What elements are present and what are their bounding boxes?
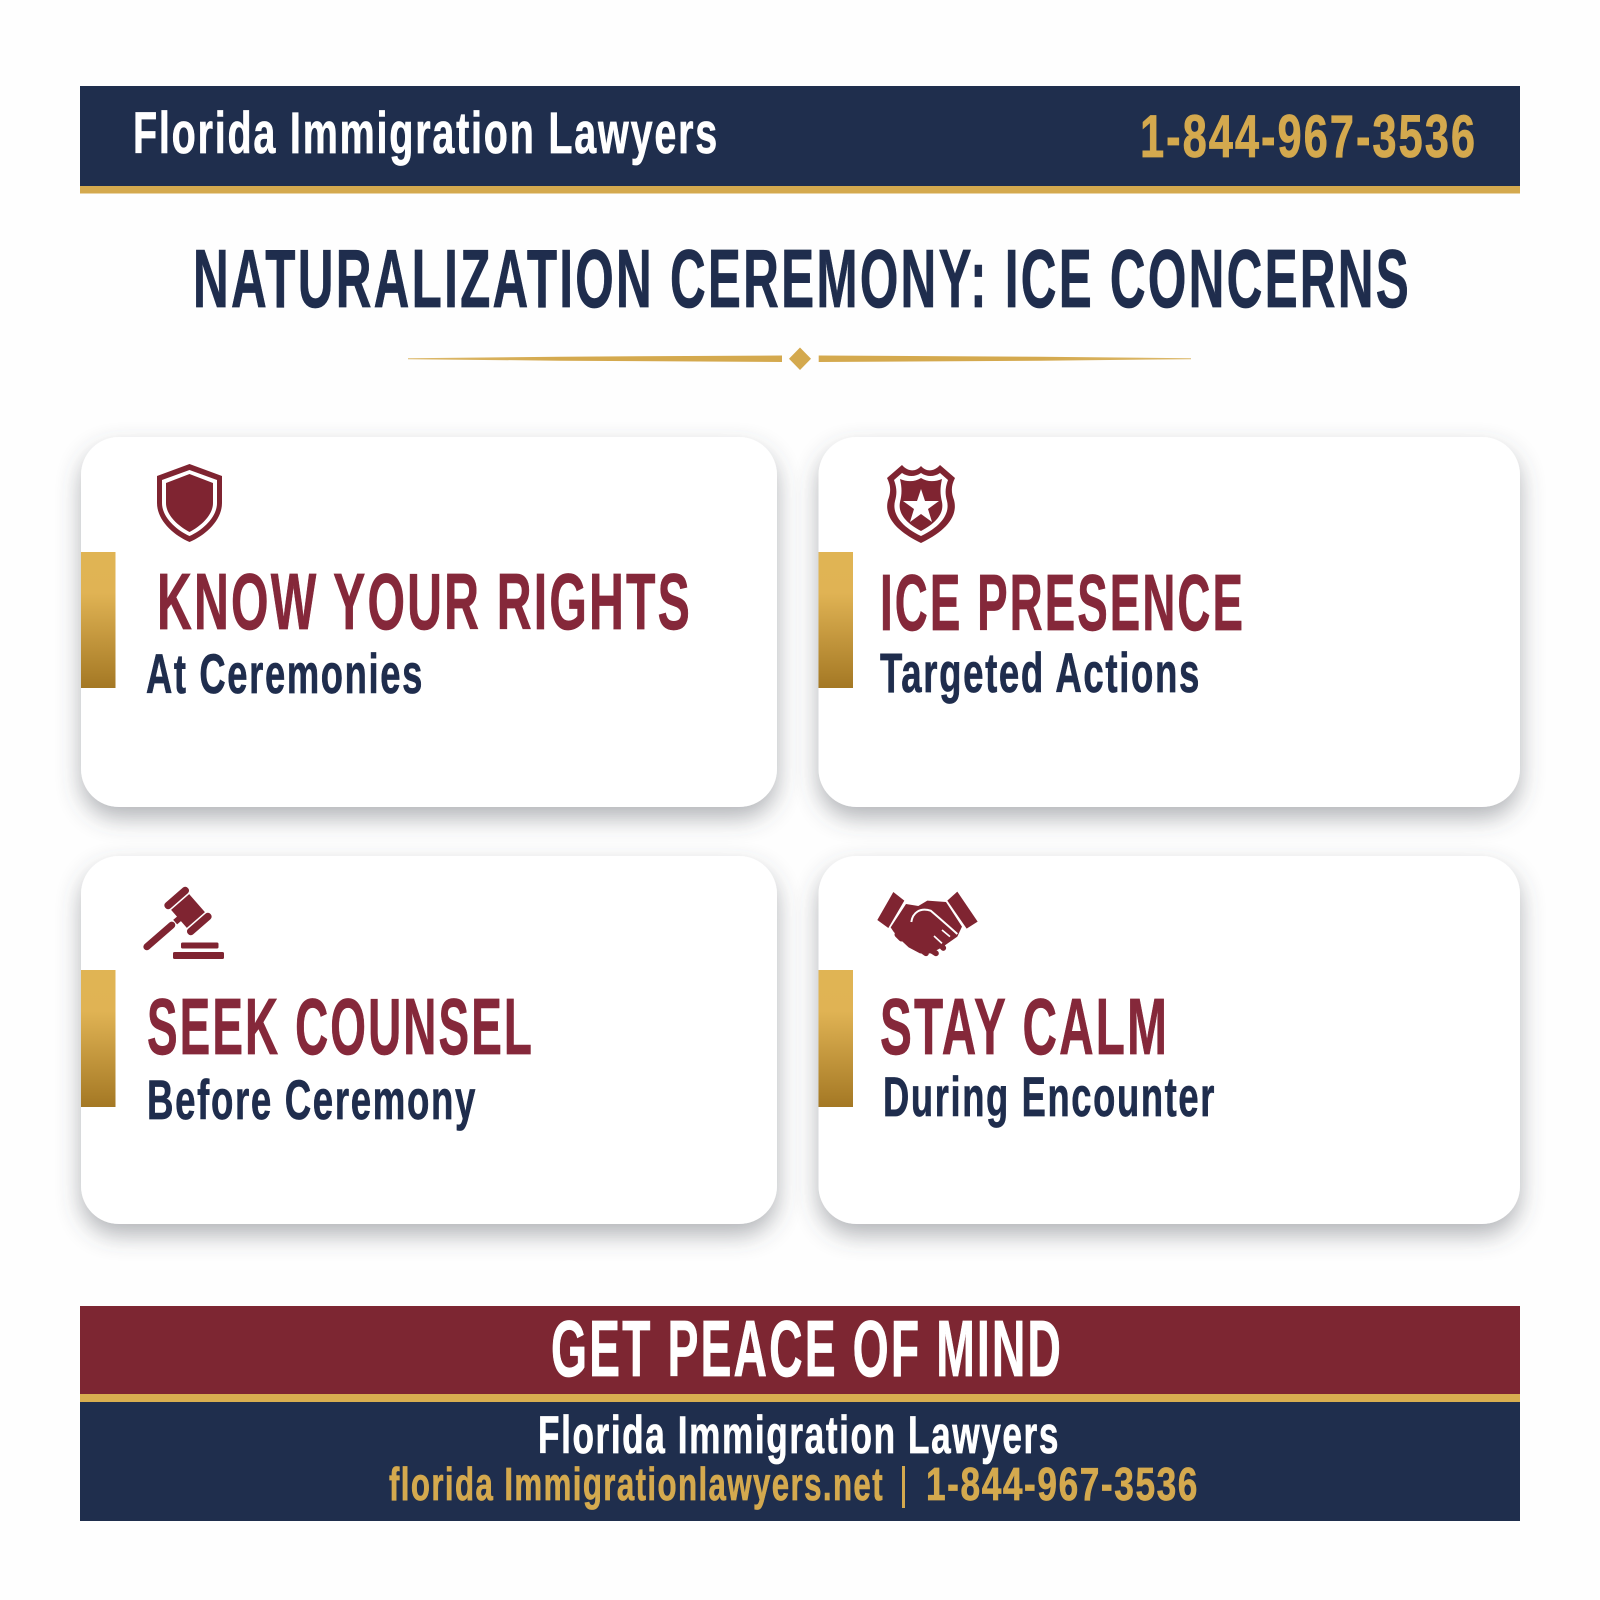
footer website: florida Immigrationlawyers.net (389, 1458, 884, 1510)
card subtitle: Before Ceremony (147, 1068, 477, 1131)
card subtitle: At Ceremonies (146, 642, 424, 705)
icon: shield (157, 464, 222, 542)
card subtitle: Targeted Actions (880, 641, 1201, 704)
header firm name: Florida Immigration Lawyers (133, 101, 719, 166)
icon: gavel (130, 885, 224, 965)
card title: STAY CALM (880, 982, 1169, 1071)
card title: ICE PRESENCE (880, 558, 1245, 647)
panel: seek counsel (81, 856, 777, 1224)
footer firm name: Florida Immigration Lawyers (538, 1406, 1060, 1465)
panel: ice presence (818, 437, 1520, 807)
icon: police badge (887, 465, 955, 543)
card title: SEEK COUNSEL (147, 982, 534, 1071)
call to action: GET PEACE OF MIND (551, 1304, 1063, 1393)
title divider with diamond (408, 348, 1191, 370)
header bar (80, 86, 1520, 194)
icon: handshake (877, 892, 978, 953)
card subtitle: During Encounter (883, 1065, 1216, 1128)
footer phone number: 1-844-967-3536 (926, 1458, 1199, 1510)
card title: KNOW YOUR RIGHTS (157, 557, 692, 646)
panel: stay calm (818, 856, 1520, 1224)
header phone number: 1-844-967-3536 (1140, 103, 1477, 170)
footer band (80, 1304, 1520, 1521)
panel: know your rights (81, 437, 777, 807)
